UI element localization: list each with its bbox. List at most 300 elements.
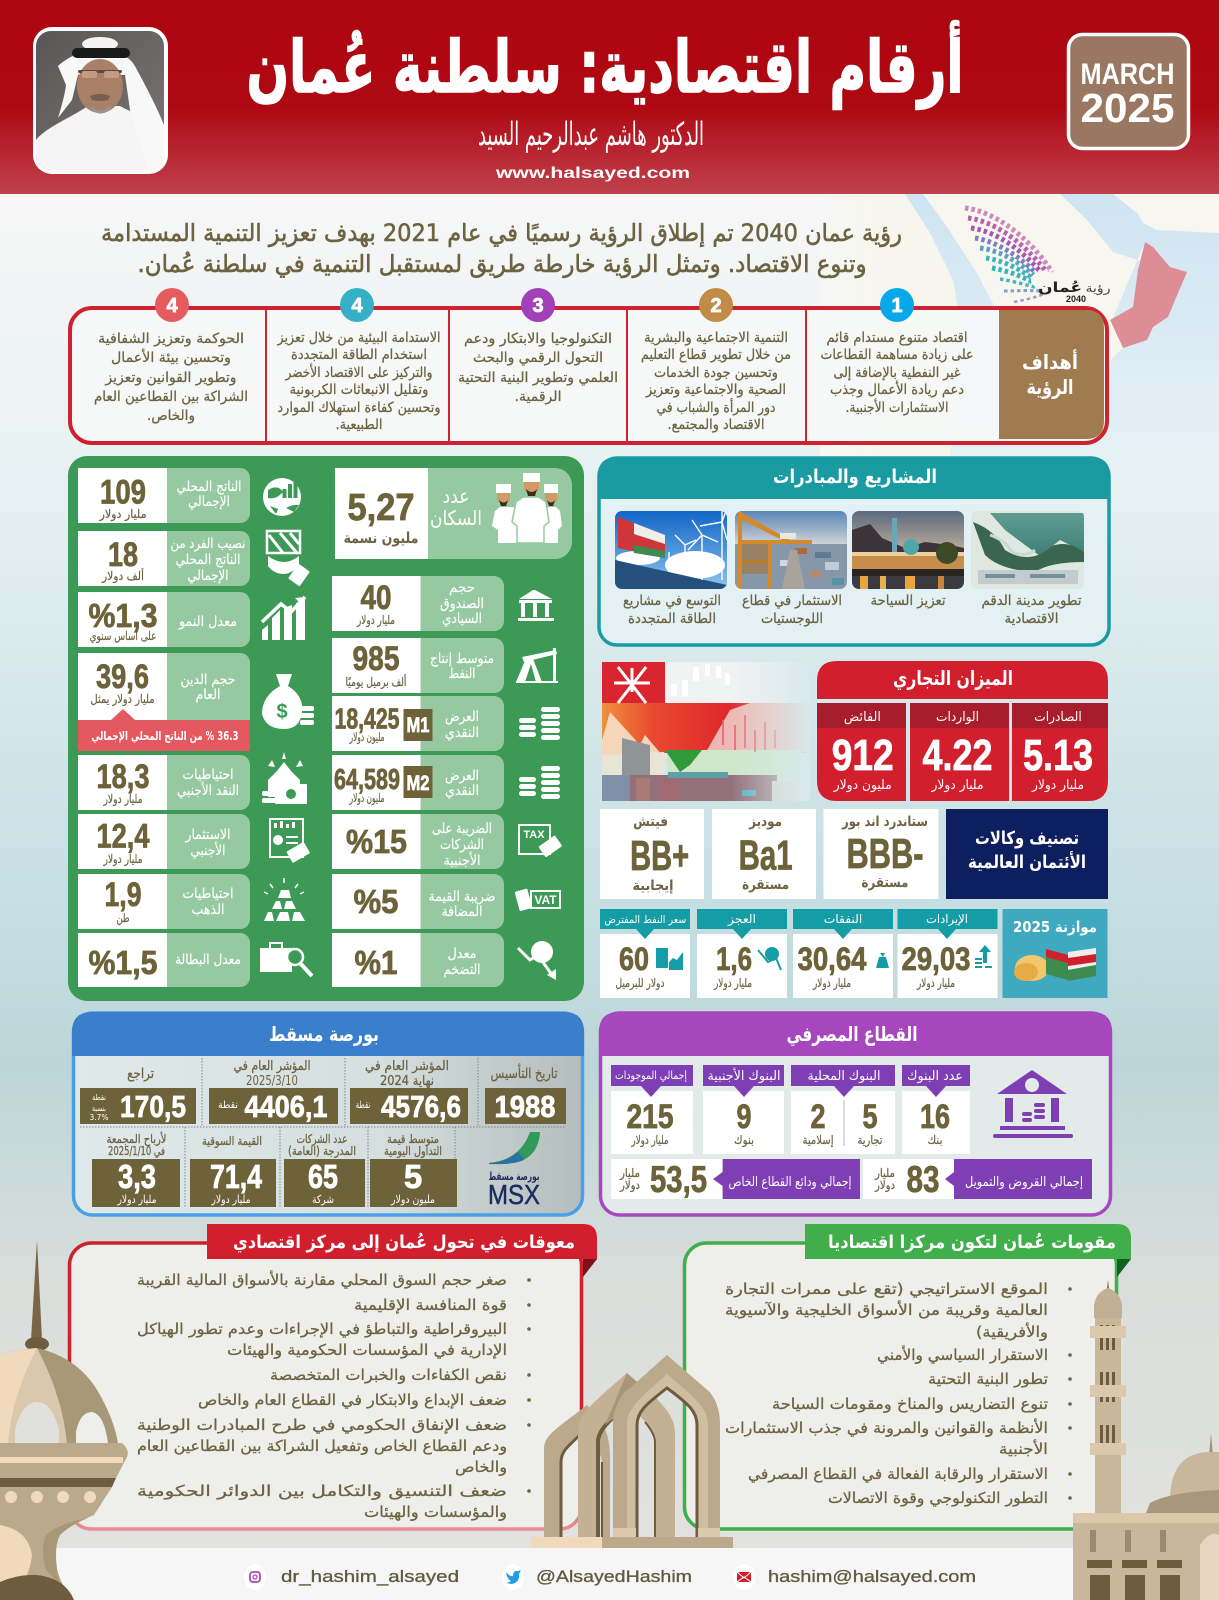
vision 2040 logo: 2040 [1066, 294, 1086, 304]
goal 3: التحول الرقمي والبحث [473, 350, 603, 366]
goals label box [999, 310, 1104, 439]
aggregate profits [92, 1131, 180, 1207]
assumed oil price: سعر النفط المفترض [604, 914, 686, 926]
index end 2024: نهاية 2024 [380, 1074, 434, 1089]
image: Oman flag and market chart [602, 662, 810, 801]
VAT: المضافة [442, 904, 482, 920]
local banks: البنوك المحلية [808, 1069, 880, 1084]
population: السكان [430, 506, 482, 530]
goal 4 environment: استخدام الطاقة المتجددة [291, 347, 427, 363]
left arch [544, 1405, 610, 1537]
goal 4 governance: وتحسين بيئة الأعمال [111, 348, 231, 366]
total assets: إجمالي الموجودات [615, 1069, 687, 1082]
GDP: الإجمالي [188, 494, 230, 510]
market value: القيمة السوقية [202, 1134, 262, 1149]
obstacles list: البيروقراطية والتباطؤ في الإجراءات وعدم تطور الهياكل [137, 1320, 507, 1339]
foreign reserves: 18,3 [96, 758, 150, 796]
local banks: تجارية [858, 1133, 882, 1148]
obstacles list: ضعف الإبداع والابتكار في القطاع العام والخاص [198, 1391, 507, 1410]
decline [80, 1066, 196, 1124]
aggregate profits: لأرباح المجمعة [106, 1131, 166, 1147]
goal 3: 3 [532, 295, 544, 317]
VAT: %5 [354, 883, 398, 920]
goal 2: التنمية الاجتماعية والبشرية [644, 330, 788, 346]
illustration: incense burner on left [0, 1240, 128, 1600]
MSX logo: بورصة مسقط [488, 1170, 540, 1183]
goal 3: التكنولوجيا والابتكار ودعم [464, 331, 612, 347]
goal 4 governance: والخاص. [147, 408, 195, 424]
project captions [623, 593, 1082, 627]
average daily trading: مليون دولار [390, 1193, 435, 1206]
unemployment: معدل البطالة [175, 952, 241, 968]
panel: 2025 budget [600, 909, 1108, 998]
founding date [485, 1063, 566, 1124]
revenues: 29,03 [902, 941, 970, 977]
market value [190, 1134, 276, 1207]
footer contacts [244, 1564, 976, 1590]
population: مليون نسمة [344, 529, 418, 547]
decline: نقطة [92, 1093, 106, 1102]
inflation: معدل [448, 946, 476, 962]
money supply M1: M1 [406, 714, 430, 737]
listed companies: عدد الشركات [296, 1132, 348, 1147]
middle arch [578, 1373, 675, 1537]
index end 2024: نقطة [356, 1100, 370, 1111]
number of banks: عدد البنوك [907, 1069, 963, 1084]
icons: right column: VAT [534, 893, 557, 907]
assumed oil price: دولار للبرميل [616, 976, 664, 991]
surplus: الفائض [844, 710, 881, 725]
GDP: مليار دولار [99, 507, 146, 522]
GDP per capita: ألف دولار [101, 568, 144, 584]
foreign investment: الأجنبي [190, 841, 226, 859]
goal 4 governance: الحوكمة وتعزيز الشفافية [98, 331, 244, 347]
number of banks: بنك [928, 1133, 942, 1147]
header banner [0, 0, 1219, 194]
sovereign fund: مليار دولار [356, 613, 395, 628]
growth rate [78, 592, 250, 647]
decline: بنسبة [92, 1104, 106, 1113]
strengths list: الاستقرار والرقابة الفعالة في القطاع المصرفي [748, 1465, 1048, 1484]
foreign investment [78, 814, 250, 869]
foreign reserves: مليار دولار [103, 792, 142, 807]
decline: 3.7% [89, 1113, 109, 1122]
deficit [697, 909, 787, 998]
growth rate: على أساس سنوي [90, 628, 156, 644]
goal 1: اقتصاد متنوع مستدام قائم [826, 330, 968, 346]
gold reserves [78, 874, 250, 929]
map of Arabian Peninsula with Oman highlighted [820, 194, 1219, 464]
index March 2025: 4406,1 [244, 1089, 328, 1124]
total assets [611, 1065, 693, 1154]
surplus: مليون دولار [833, 778, 892, 793]
loans and financing: إجمالي القروض والتمويل [965, 1175, 1083, 1190]
icons: left column: $ [276, 701, 288, 723]
photo: renewable energy [615, 508, 727, 589]
corporate tax: %15 [346, 823, 407, 860]
obstacles list: نقص الكفاءات والخبرات المتخصصة [270, 1366, 507, 1384]
private deposits: إجمالي ودائع القطاع الخاص [728, 1175, 852, 1190]
index March 2025: نقطة [218, 1100, 238, 1111]
index end 2024: 4576,6 [381, 1089, 461, 1124]
project captions: تعزيز السياحة [870, 593, 946, 609]
strengths list: تنوع التضاريس والمناخ ومقومات السياحة [772, 1395, 1048, 1413]
goal 4 governance: الشراكة بين القطاعين العام [94, 389, 248, 405]
goal 3: العلمي وتطوير البنية التحتية [458, 370, 618, 386]
public debt [78, 653, 250, 751]
goal 4 environment [277, 288, 440, 433]
GDP per capita: 18 [108, 536, 138, 574]
S&P rating [824, 809, 938, 899]
private deposits: 53,5 [650, 1159, 707, 1200]
obstacles list: والمؤسسات والهيئات [364, 1503, 507, 1521]
money supply M1: 18,425 [334, 704, 400, 736]
money supply M2: مليون دولار [349, 791, 384, 806]
panel: trade balance [817, 661, 1108, 801]
strengths heading: مقومات عُمان لتكون مركزا اقتصاديا [828, 1231, 1116, 1253]
obstacles list: قوة المنافسة الإقليمية [354, 1296, 507, 1314]
goal 4 governance: وتطوير القوانين وتعزيز [105, 370, 236, 386]
Moody's rating: موديز [748, 814, 782, 830]
goal 4 environment: الطبيعية. [336, 417, 382, 433]
public debt: العام [196, 687, 220, 703]
index March 2025: 2025/3/10 [246, 1074, 298, 1089]
corporate tax: الأجنبية [444, 851, 480, 869]
footer band [0, 1548, 1219, 1600]
money supply M2: 64,589 [334, 764, 400, 796]
Moody's rating: Ba1 [739, 832, 793, 878]
goal 4 environment: والتركيز على الاقتصاد الأخضر [285, 363, 432, 381]
expenses: 30,64 [798, 941, 867, 977]
public debt: مليار دولار يمثل [90, 692, 154, 707]
sovereign fund [332, 576, 504, 631]
panel: banking sector [599, 1012, 1112, 1215]
obstacles list: صغر حجم السوق المحلي مقارنة بالأسواق المالية القريبة [137, 1270, 507, 1290]
strengths list: الموقع الاستراتيجي (تقع على ممرات التجارة [725, 1280, 1048, 1299]
main arch [613, 1355, 720, 1537]
Fitch rating: BB+ [630, 832, 689, 879]
deficit: 1,6 [716, 941, 752, 977]
goal 4 governance: 4 [166, 295, 178, 317]
panel: key indicators [68, 456, 584, 1001]
money supply M1: مليون دولار [349, 730, 384, 745]
goal 1: دعم ريادة الأعمال وجذب [830, 380, 964, 398]
market value: 71,4 [210, 1158, 263, 1195]
average daily trading [370, 1132, 457, 1207]
obstacles list: والخاص [455, 1458, 507, 1476]
exports: 5.13 [1023, 731, 1093, 780]
project captions: تطوير مدينة الدقم [982, 593, 1082, 609]
project captions: الطاقة المتجددة [628, 611, 716, 627]
oil production: ألف برميل يوميًا [346, 674, 406, 690]
strengths list: تطور البنية التحتية [928, 1370, 1048, 1388]
GDP per capita: نصيب الفرد من [170, 536, 246, 552]
loans and financing: دولار [874, 1178, 895, 1193]
local banks: إسلامية [802, 1133, 834, 1147]
twitter: @AlsayedHashim [536, 1567, 692, 1586]
panel: Muscat stock exchange [72, 1012, 584, 1215]
S&P rating: مستقرة [862, 875, 908, 891]
expenses [793, 909, 893, 998]
local banks: 5 [862, 1098, 878, 1136]
website: www.halsayed.com [495, 165, 690, 182]
Moody's rating [712, 809, 816, 899]
foreign reserves: النقد الأجنبي [177, 781, 239, 799]
MSX logo: MSX [488, 1179, 540, 1210]
goal 2: من خلال تطوير قطاع التعليم [641, 347, 791, 363]
total assets: 215 [626, 1098, 674, 1136]
GDP per capita: الإجمالي [188, 568, 228, 584]
MSX logo [488, 1132, 540, 1210]
imports [910, 703, 1009, 801]
corporate tax [332, 814, 504, 869]
average daily trading: التداول اليومية [384, 1144, 442, 1159]
foreign investment: مليار دولار [103, 852, 142, 867]
instagram [244, 1564, 459, 1590]
goal 1: 1 [891, 295, 903, 317]
index March 2025 [209, 1059, 338, 1124]
decline: تراجع [127, 1066, 154, 1082]
ratings title: الأئتمان العالمية [968, 851, 1086, 873]
Fitch rating: إيجابية [632, 878, 674, 894]
budget title with coins and flags [1002, 909, 1108, 998]
population: 5,27 [348, 487, 414, 529]
inflation: التضخم [444, 962, 480, 978]
panel: trade balance: الميزان التجاري [893, 666, 1013, 691]
market value: مليار دولار [211, 1193, 251, 1206]
oil production [332, 638, 504, 693]
gold reserves: طن [116, 911, 130, 926]
project captions: التوسع في مشاريع [623, 593, 721, 609]
gold reserves: 1,9 [104, 876, 142, 914]
oil production: 985 [352, 640, 400, 678]
goal 1: الاستثمارات الأجنبية. [846, 398, 948, 416]
ratings title [946, 809, 1108, 899]
goal 2 [641, 288, 791, 433]
illustration: arches in center [531, 1355, 733, 1548]
obstacles heading [207, 1224, 597, 1259]
project captions: اللوجستيات [761, 611, 823, 627]
sovereign fund: السيادي [442, 611, 482, 627]
gold reserves: احتياطيات [182, 886, 234, 902]
icons: right column: TAX [523, 829, 545, 841]
aggregate profits: في 2025/1/10 [108, 1144, 165, 1158]
money supply M1: النقدي [445, 725, 479, 741]
unemployment [78, 933, 250, 987]
goal 4 environment: الاستدامة البيئية من خلال تعزيز [277, 330, 440, 346]
foreign reserves [78, 755, 250, 810]
photo: Duqm [971, 511, 1084, 589]
aggregate profits: 3,3 [118, 1158, 156, 1195]
gold reserves: الذهب [192, 902, 224, 918]
listed companies: شركة [312, 1193, 334, 1206]
oil production: النفط [448, 666, 476, 682]
deficit: العجز [727, 912, 756, 927]
money supply M1: العرض [445, 709, 479, 725]
panel: strengths [684, 1224, 1131, 1529]
strengths list [725, 1280, 1072, 1508]
goal 1 [820, 288, 974, 416]
public debt: 36.3 % من الناتج المحلي الإجمالي [91, 729, 238, 743]
project captions: الاقتصادية [1004, 611, 1058, 627]
average daily trading: 5 [404, 1158, 422, 1195]
private deposits: مليار [619, 1166, 640, 1181]
money supply M2: M2 [406, 772, 430, 795]
number of banks [902, 1065, 970, 1154]
revenues [898, 909, 998, 998]
date badge: 2025 [1080, 85, 1174, 131]
sovereign fund: 40 [360, 579, 392, 617]
strengths list: والأفريقية) [976, 1322, 1048, 1341]
goal 4 environment: وتقليل الانبعاثات الكربونية [290, 382, 428, 398]
assumed oil price: 60 [619, 941, 649, 977]
sovereign fund: حجم [449, 580, 475, 596]
imports: 4.22 [922, 731, 992, 780]
imports: الواردات [936, 710, 979, 725]
panel: projects and initiatives [598, 457, 1110, 645]
public debt: 39,6 [96, 658, 149, 696]
private deposits [611, 1159, 860, 1200]
goals label box: الرؤية [1026, 375, 1074, 399]
goal 2: الصحية والاجتماعية وتعزيز [645, 382, 786, 398]
expenses: النفقات [824, 912, 862, 926]
VAT [332, 874, 504, 929]
icons: left column [260, 478, 314, 976]
deficit: مليار دولار [713, 976, 752, 991]
goal 1: على زيادة مساهمة القطاعات [820, 347, 974, 363]
aggregate profits: مليار دولار [117, 1193, 157, 1206]
GDP per capita [78, 531, 250, 586]
decline: 170,5 [120, 1089, 186, 1124]
GDP: الناتج المحلي [176, 479, 242, 495]
money supply M2 [332, 755, 504, 810]
population [335, 468, 572, 559]
Moody's rating: مستقرة [742, 877, 789, 893]
unemployment: %1,5 [88, 944, 158, 981]
average daily trading: متوسط قيمة [387, 1132, 439, 1147]
panel: banking sector: القطاع المصرفي [786, 1022, 918, 1047]
inflation: %1 [354, 944, 398, 981]
surplus: 912 [832, 731, 894, 780]
foreign investment: 12,4 [96, 818, 150, 856]
foreign banks: 9 [736, 1098, 752, 1136]
icon: three men [492, 473, 562, 543]
obstacles list [137, 1270, 531, 1521]
money supply M2: النقدي [445, 783, 479, 799]
signature: الدكتور هاشم عبدالرحيم السيد [478, 115, 704, 153]
foreign reserves: احتياطيات [182, 767, 234, 783]
foreign banks [703, 1065, 784, 1154]
strengths list: الاستقرار السياسي والأمني [877, 1345, 1048, 1365]
founding date: تاريخ التأسيس [490, 1063, 558, 1082]
goal 4 environment: 4 [351, 295, 363, 317]
index March 2025: المؤشر العام في [234, 1059, 310, 1074]
exports: مليار دولار [1031, 778, 1084, 793]
private deposits: دولار [619, 1178, 640, 1193]
icon: bank with coins [993, 1070, 1073, 1138]
strengths list: الأجنبية [999, 1439, 1048, 1458]
date badge: MARCH [1080, 58, 1174, 91]
Fitch rating [600, 809, 704, 899]
vision 2040 logo: رؤية [1086, 281, 1111, 296]
surplus [817, 703, 906, 801]
listed companies [284, 1132, 365, 1207]
revenues: مليار دولار [916, 976, 955, 991]
email: hashim@halsayed.com [768, 1567, 976, 1586]
revenues: الإيرادات [926, 912, 968, 927]
founding date: 1988 [494, 1089, 556, 1124]
ratings title: تصنيف وكالات [975, 828, 1079, 849]
local banks: 2 [810, 1098, 826, 1136]
panel: credit ratings [600, 809, 1108, 899]
sovereign fund: الصندوق [440, 596, 484, 612]
index end 2024 [350, 1059, 468, 1124]
assumed oil price [600, 909, 690, 998]
intro text: رؤية عمان 2040 تم إطلاق الرؤية رسميًا في عام 2021 بهدف تعزيز التنمية المستدامة [101, 219, 902, 248]
vision 2040 logo: عُمان [1038, 280, 1082, 296]
foreign banks: البنوك الأجنبية [708, 1067, 780, 1084]
loans and financing: مليار [874, 1166, 895, 1181]
goal 4 environment: وتحسين كفاءة استهلاك الموارد [278, 400, 440, 416]
goal 2: الاقتصاد والمجتمع. [668, 417, 764, 433]
panel: projects and initiatives: المشاريع والمبادرات [773, 466, 937, 488]
loans and financing: 83 [906, 1159, 940, 1200]
local banks [791, 1065, 895, 1154]
vision 2040 logo [965, 208, 1111, 304]
obstacles heading: معوقات في تحول عُمان إلى مركز اقتصادي [233, 1231, 575, 1253]
icons: right column [515, 590, 562, 980]
goals label box: أهداف [1022, 348, 1078, 374]
obstacles list: ضعف التنسيق والتكامل بين الدوائر الحكومية [137, 1482, 507, 1500]
goal 1: غير النفطية بالإضافة إلى [834, 365, 960, 381]
exports: الصادرات [1034, 710, 1082, 725]
panel: obstacles [70, 1224, 597, 1529]
photo: logistics [735, 511, 847, 589]
imports: مليار دولار [931, 778, 984, 793]
foreign banks: بنوك [734, 1133, 754, 1148]
GDP per capita: الناتج المحلي [176, 552, 240, 568]
corporate tax: الشركات [440, 837, 484, 853]
photo: tourism [852, 511, 964, 589]
budget title with coins and flags: موازنة 2025 [1013, 918, 1097, 936]
instagram: dr_hashim_alsayed [281, 1567, 459, 1586]
goal 2: 2 [710, 295, 722, 317]
goal 2: وتحسين جودة الخدمات [654, 365, 778, 381]
money supply M2: العرض [445, 768, 479, 784]
panel: vision goals [70, 288, 1107, 443]
S&P rating: ستاندرد اند بور [841, 814, 928, 830]
panel: Muscat stock exchange: بورصة مسقط [269, 1022, 379, 1046]
VAT: ضريبة القيمة [428, 889, 496, 905]
date badge [1068, 34, 1188, 148]
money supply M1 [332, 696, 504, 751]
total assets: مليار دولار [631, 1133, 668, 1148]
intro text [101, 219, 902, 278]
goal 4 governance [94, 288, 248, 424]
number of banks: 16 [920, 1098, 950, 1136]
public debt: حجم الدين [180, 672, 236, 688]
strengths heading [805, 1224, 1131, 1259]
strengths list: الأنظمة والقوانين والمرونة في جذب الاستثمارات [725, 1418, 1048, 1438]
S&P rating: BBB- [846, 830, 924, 877]
foreign investment: الاستثمار [185, 827, 230, 843]
population: عدد [442, 484, 470, 508]
portrait photo [33, 27, 168, 174]
loans and financing [863, 1159, 1092, 1200]
strengths list: العالمية وقريبة من الأسواق الخليجية والآسيوية [725, 1300, 1048, 1319]
growth rate: معدل النمو [178, 614, 237, 630]
expenses: مليار دولار [812, 976, 851, 991]
